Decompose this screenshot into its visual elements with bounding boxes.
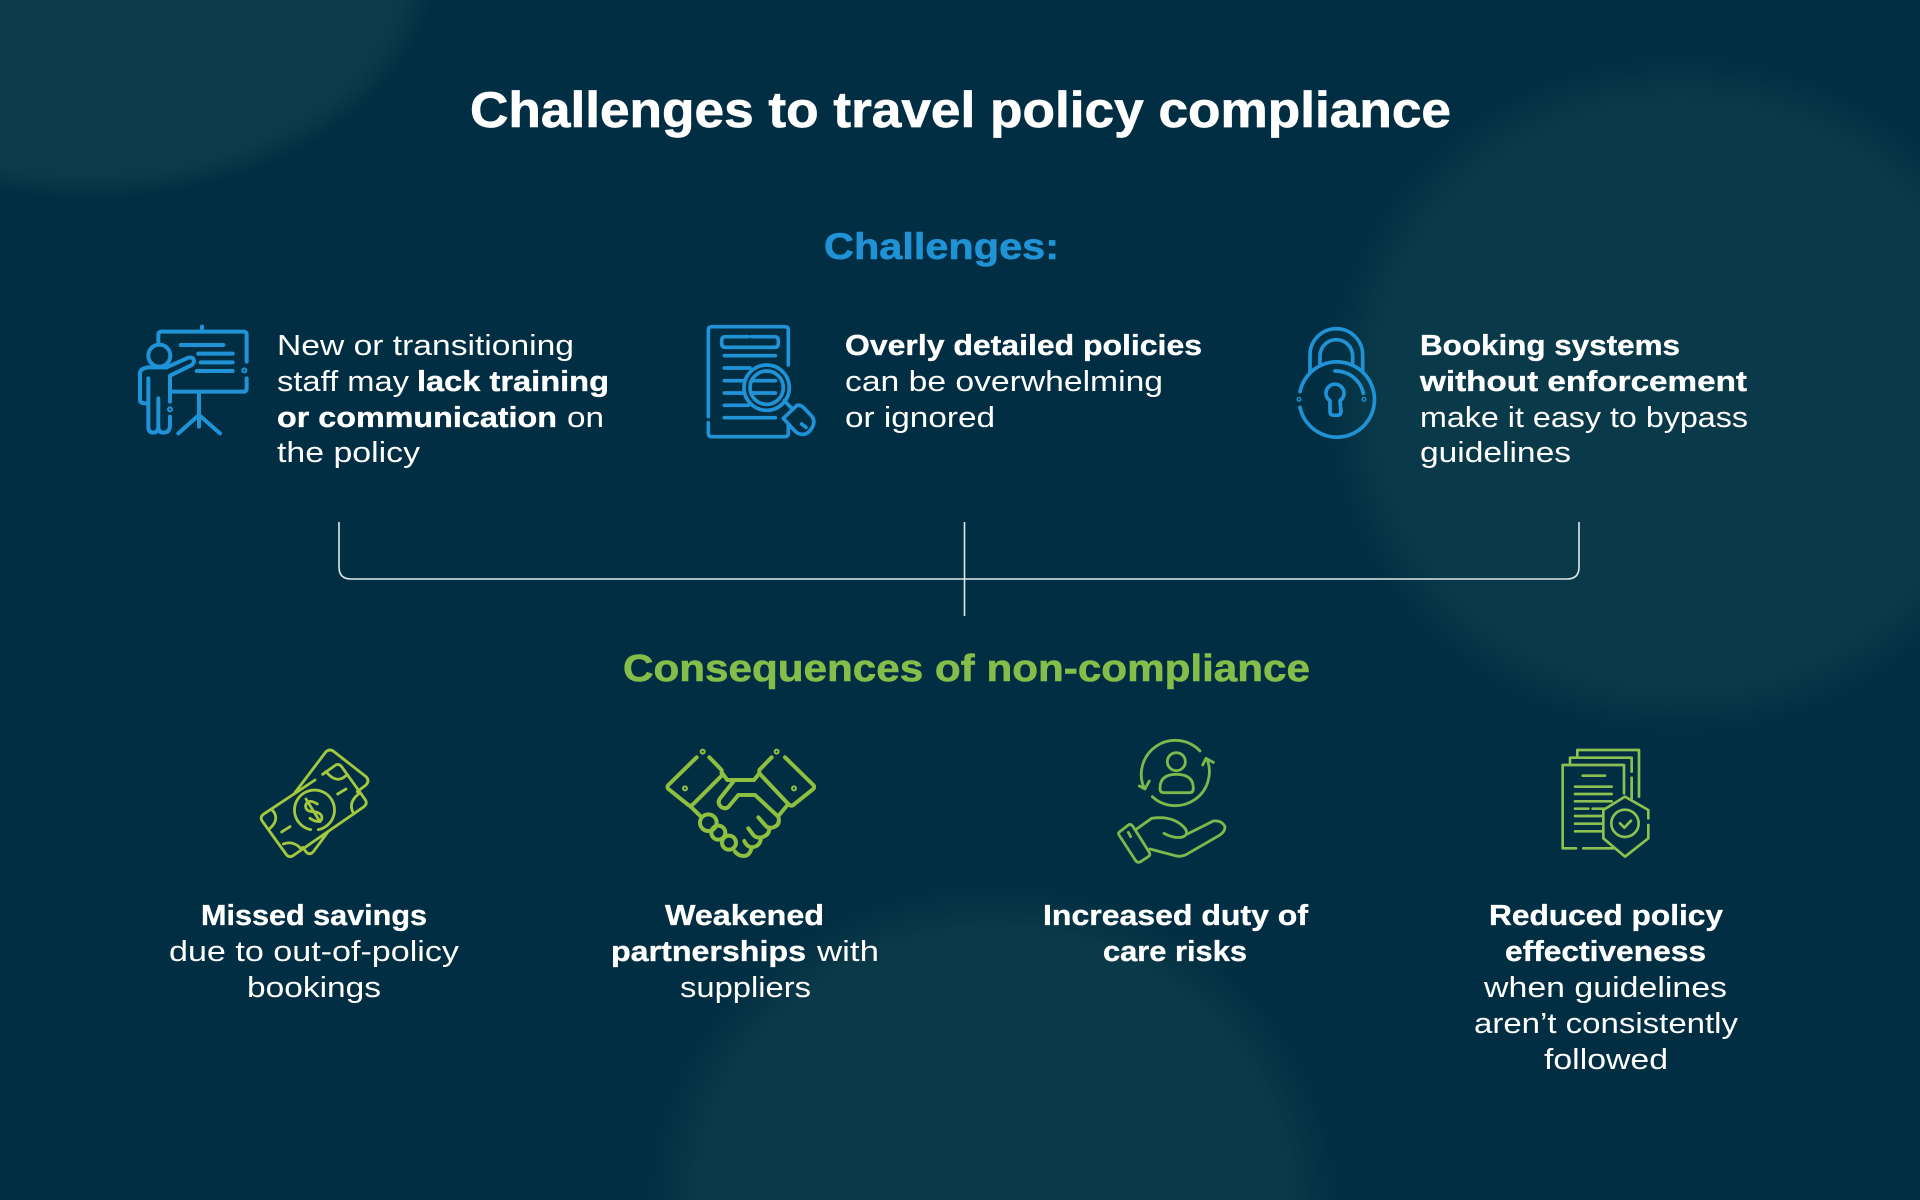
- text: reduced effectiveness: Reduced policy: [1489, 900, 1723, 932]
- icon: padlock: [1298, 329, 1375, 437]
- text: booking systems: without enforcement: [1419, 366, 1747, 398]
- panel: challenge training: [140, 327, 609, 469]
- text: training: the policy: [277, 437, 421, 469]
- panel: challenge booking systems: [1298, 329, 1748, 469]
- text: training: [277, 330, 609, 469]
- text: weakened partnerships: Weakened: [665, 900, 824, 932]
- panel: reduced effectiveness: [1474, 750, 1739, 1076]
- icon: document with magnifier: [708, 327, 814, 437]
- text: reduced effectiveness: followed: [1544, 1044, 1668, 1076]
- panel: weakened partnerships: [611, 751, 879, 1004]
- heading: consequences: Consequences of non-compliance: [623, 648, 1310, 690]
- text: detailed policies: [845, 330, 1202, 434]
- text: booking systems: make it easy to bypass: [1420, 402, 1748, 434]
- text: duty of care: Increased duty of: [1043, 900, 1308, 932]
- text: booking systems: Booking systems: [1420, 330, 1680, 362]
- title: Challenges to travel policy compliance: [470, 82, 1451, 138]
- text: detailed policies: can be overwhelming: [845, 366, 1163, 398]
- text: reduced effectiveness: when guidelines: [1483, 972, 1727, 1004]
- text: weakened partnerships: suppliers: [680, 972, 811, 1004]
- heading: challenges: Challenges:: [824, 226, 1059, 267]
- icon: handshake: [667, 751, 814, 856]
- text: duty of care: [1043, 900, 1308, 968]
- text: training: on: [567, 402, 604, 434]
- text: missed savings: Missed savings: [201, 900, 427, 932]
- bracket connector: [339, 522, 1579, 616]
- text: weakened partnerships: [611, 900, 879, 1004]
- text: missed savings: [169, 900, 460, 1004]
- text: booking systems: [1419, 330, 1748, 469]
- text: missed savings: due to out-of-policy: [169, 936, 460, 968]
- panel: challenge detailed policies: [708, 327, 1202, 437]
- text: training: or communication: [277, 402, 557, 434]
- text: training: New or transitioning: [277, 330, 574, 362]
- icon: banknotes: [261, 750, 368, 857]
- panel: duty of care: [1043, 740, 1308, 968]
- text: reduced effectiveness: effectiveness: [1505, 936, 1706, 968]
- text: detailed policies: Overly detailed policies: [845, 330, 1202, 362]
- panel: missed savings: [169, 750, 460, 1004]
- text: reduced effectiveness: [1474, 900, 1739, 1076]
- text: missed savings: bookings: [247, 972, 381, 1004]
- text: duty of care: care risks: [1103, 936, 1247, 968]
- text: detailed policies: or ignored: [845, 402, 995, 434]
- icon: documents with shield: [1563, 750, 1648, 857]
- text: reduced effectiveness: aren’t consistently: [1474, 1008, 1739, 1040]
- icon: person in hand: [1119, 740, 1225, 862]
- text: weakened partnerships: with: [816, 936, 879, 968]
- text: training: lack training: [417, 366, 609, 398]
- text: booking systems: guidelines: [1420, 437, 1571, 469]
- text: weakened partnerships: partnerships: [611, 936, 806, 968]
- icon: presenter at board: [140, 327, 247, 433]
- text: training: staff may: [277, 366, 410, 398]
